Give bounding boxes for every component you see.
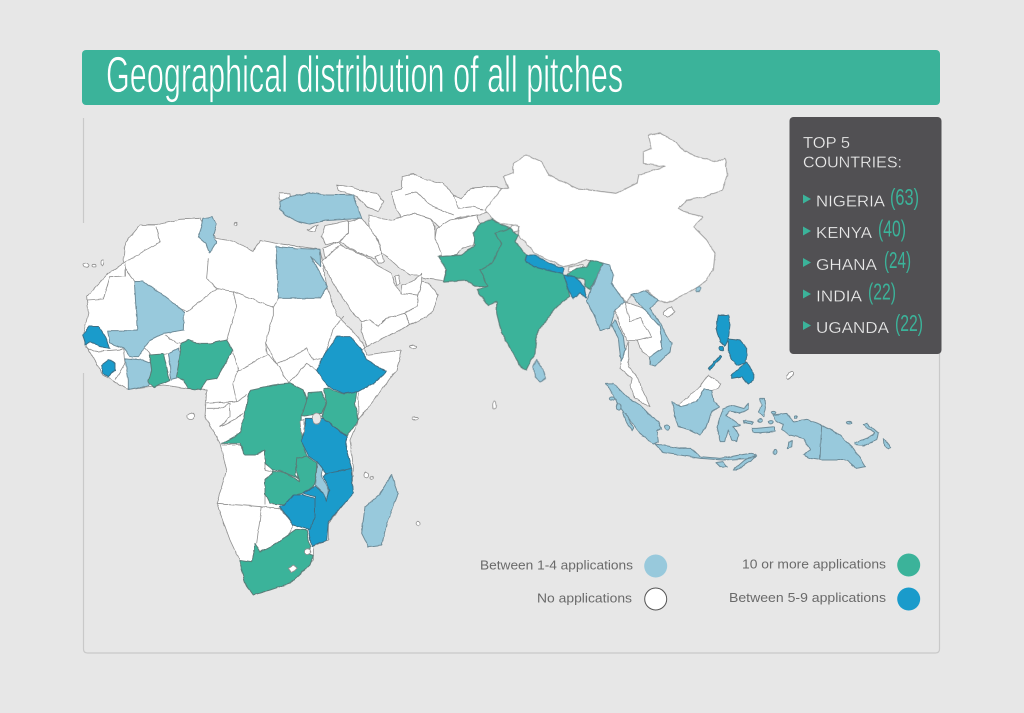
map <box>83 133 891 595</box>
row: Kenya <box>803 216 906 242</box>
row: Uganda <box>803 310 923 337</box>
map: Africa <box>83 217 420 595</box>
Africa: 5-9 applications <box>83 326 387 547</box>
row: Kenya: (40) <box>878 216 906 242</box>
panel: map frame <box>84 118 940 653</box>
islands: 1-4 applications <box>606 383 891 470</box>
Africa: 1-4 applications <box>108 217 398 547</box>
South Asia: 5-9 applications <box>526 255 587 298</box>
row: India <box>803 278 896 306</box>
mainland countries with no applications <box>615 302 675 407</box>
row: Kenya: KENYA <box>816 225 872 242</box>
legend: no applications: No applications <box>537 590 633 606</box>
row: Uganda: (22) <box>895 310 923 336</box>
legend: no applications <box>537 588 667 610</box>
South Asia: 1-4 applications <box>533 287 701 382</box>
legend: between 5-9 applications: Between 5-9 applications <box>729 590 887 605</box>
map: Indonesia and Papua New Guinea <box>606 370 891 470</box>
legend: between 1-4 applications: Between 1-4 applications <box>480 558 634 572</box>
Myanmar and Vietnam <box>587 263 672 367</box>
callout heading line 2: COUNTRIES: <box>803 154 902 172</box>
legend: 10 or more applications <box>742 554 920 576</box>
African countries with no applications <box>83 218 420 595</box>
China and neighbours with no applications <box>485 133 794 409</box>
legend: between 1-4 applications <box>480 554 667 578</box>
legend: 10 or more applications: 10 or more applications <box>742 556 887 572</box>
legend <box>480 554 920 610</box>
legend: between 5-9 applications <box>729 588 920 610</box>
map: South Asia and China <box>438 133 794 409</box>
row: Ghana <box>803 247 911 274</box>
lakes and enclaves <box>288 413 321 573</box>
row: Nigeria <box>803 184 919 210</box>
callout: top 5 countries <box>790 117 942 354</box>
row: Nigeria: (63) <box>890 184 919 210</box>
South Asia: 10 or more applications <box>438 219 603 370</box>
callout heading: TOP 5 <box>803 135 850 152</box>
row: Ghana: GHANA <box>816 257 877 274</box>
map: Middle East <box>279 174 503 349</box>
row: India: (22) <box>868 278 896 304</box>
row: Ghana: (24) <box>884 247 911 273</box>
Philippines <box>708 315 753 384</box>
New Guinea border <box>820 425 822 460</box>
row: India: INDIA <box>816 288 862 306</box>
map: mainland South-East Asia and Philippines <box>587 263 753 407</box>
Africa: 10 or more applications <box>148 340 358 595</box>
row: Nigeria: NIGERIA <box>816 194 885 210</box>
row: Uganda: UGANDA <box>816 320 889 337</box>
title banner: Geographical distribution of all pitches <box>106 46 623 103</box>
title banner <box>82 46 940 105</box>
Sabah white <box>678 370 794 407</box>
map: Turkey <box>279 193 362 224</box>
